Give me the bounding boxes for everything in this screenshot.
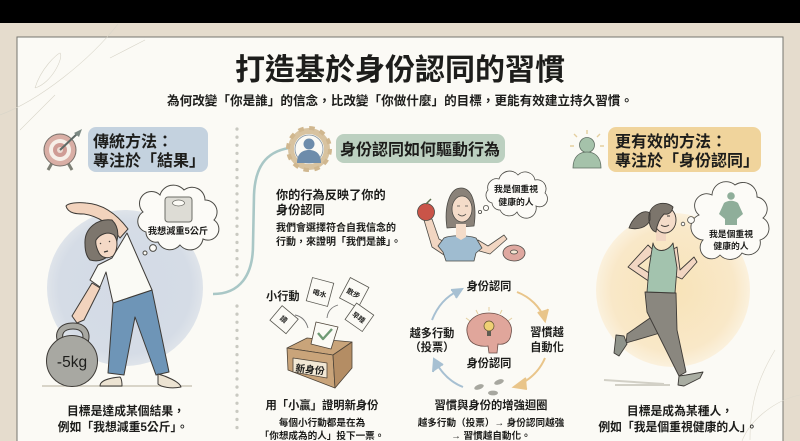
eyes and smile (661, 216, 670, 226)
jeans (108, 290, 169, 375)
text block: small wins (260, 398, 384, 441)
arms (628, 245, 655, 282)
text block: behaviour reflects identity: 行動，來證明「我們是誰」。 (276, 235, 401, 248)
thought bubble: lose 5kg: 我想減重5公斤 (148, 225, 208, 236)
text block: small wins: 每個小行動都是在為 (279, 417, 366, 429)
dotted dividers (235, 129, 239, 431)
icon: ballot box (287, 322, 352, 388)
neck (656, 230, 666, 241)
illustration: woman running (604, 203, 703, 386)
text block: behaviour reflects identity: 身份認同 (276, 202, 325, 217)
text block: loop explanation: 習慣與身份的增強迴圈 (435, 398, 547, 412)
panel: traditional method (42, 127, 219, 434)
illustration: person stretching with kettlebell (42, 203, 192, 388)
left arm (424, 219, 450, 255)
caption: traditional goal: 目標是達成某個結果， (67, 404, 185, 418)
caption: identity goal (598, 404, 758, 434)
ground shadow (604, 380, 670, 385)
heading: more effective method (608, 127, 761, 172)
icon: kettlebell -5kg (46, 326, 98, 386)
icon: glowing person (570, 130, 604, 168)
donut (503, 245, 525, 261)
chart: habit identity reinforcing loop (410, 279, 565, 441)
face (654, 207, 676, 233)
caption: traditional goal: 例如「我想減重5公斤」。 (58, 420, 188, 434)
arrow: identity to habit (517, 292, 548, 321)
note: read: 讀 (278, 314, 289, 325)
right arm (476, 235, 507, 254)
thought bubble: healthy person: 我是個重視 (709, 228, 753, 239)
ballot with check (311, 322, 338, 349)
heading: traditional method: 專注於「結果」 (93, 151, 205, 170)
icon: ballot box: 新身份 (295, 362, 326, 378)
cycle node: more actions (410, 326, 454, 354)
text block: loop explanation (418, 398, 565, 441)
thought bubble: healthy person: 我是個重視 (494, 183, 538, 194)
caption: identity goal: 例如「我是個重視健康的人」。 (598, 420, 758, 434)
illustration: blue circle backdrop (47, 210, 203, 366)
icon: target (44, 129, 82, 170)
icon: bathroom scale (165, 197, 192, 222)
subtitle: 為何改變「你是誰」的信念，比改變「你做什麼」的目標，更能有效建立持久習慣。 (167, 93, 633, 108)
heading: identity (336, 134, 505, 163)
tank top (647, 243, 677, 293)
icon: brain with light bulb (466, 307, 512, 353)
arrow: actions to identity (432, 289, 462, 320)
icon: person silhouette (719, 192, 743, 225)
heading: identity: 身份認同如何驅動行為 (340, 140, 500, 159)
hair (85, 220, 118, 261)
icon: gear with person (288, 128, 330, 170)
icon: action notes (270, 278, 374, 334)
front leg (645, 292, 686, 376)
hair and ponytail (629, 203, 673, 232)
cycle node: more actions: 越多行動 (410, 326, 454, 340)
title: 打造基於身份認同的習慣 (235, 54, 565, 87)
eyes and smile (457, 206, 468, 216)
cycle node: habit automation: 習慣越 (530, 325, 564, 339)
eyes and mouth (100, 241, 110, 252)
panel: how identity drives behaviour (260, 128, 565, 441)
thought bubble: lose 5kg (138, 185, 219, 255)
thought bubble: healthy person (478, 171, 547, 218)
text block: small wins: 用「小贏」證明新身份 (266, 398, 379, 412)
cycle node: identity: 身份認同 (467, 279, 511, 293)
t-shirt (90, 233, 152, 303)
arrow: footprints to actions (433, 359, 463, 387)
heading: more effective method: 更有效的方法： (615, 132, 727, 151)
illustration: warm circle backdrop (596, 213, 750, 367)
box top (287, 338, 352, 355)
thought bubble: healthy person: 健康的人 (713, 240, 749, 251)
label: small actions: 小行動 (266, 289, 300, 303)
raised arm (66, 203, 128, 238)
arrows: actions into the box (295, 305, 338, 328)
illustration: woman choosing apple over donut (418, 188, 525, 261)
text block: behaviour reflects identity (276, 187, 401, 248)
caption: traditional goal (58, 404, 188, 434)
cycle node: more actions: （投票） (410, 340, 454, 354)
hair (446, 188, 475, 228)
caption: identity goal: 目標是成為某種人， (627, 404, 733, 418)
box side (333, 342, 352, 388)
note: drink water: 喝水 (312, 287, 328, 300)
cycle node: centre identity: 身份認同 (467, 356, 511, 370)
tee (438, 236, 482, 261)
box front (287, 348, 335, 388)
cycle node: habit automation: 自動化 (530, 340, 564, 354)
connector arrow: from left panel to centre heading (213, 148, 289, 294)
arrow: habit to footprints (514, 358, 545, 389)
icon: footprints (473, 378, 505, 395)
back leg (626, 318, 660, 343)
back shoe (614, 335, 627, 356)
text block: behaviour reflects identity: 我們會選擇符合自我信念的 (276, 221, 396, 234)
heading: traditional method: 傳統方法： (93, 132, 173, 151)
apple (418, 204, 434, 220)
front shoe (678, 372, 703, 386)
panel: more effective method (570, 127, 769, 434)
heading: traditional method (88, 127, 208, 172)
thought bubble: healthy person: 健康的人 (498, 196, 534, 207)
ground shadow (42, 385, 192, 387)
lower arm (72, 283, 100, 323)
face (452, 196, 472, 222)
text block: behaviour reflects identity: 你的行為反映了你的 (276, 187, 386, 202)
shoes (100, 377, 122, 386)
note: walk: 散步 (345, 286, 362, 301)
note: early sleep: 早睡 (350, 310, 367, 325)
cycle node: habit automation (530, 325, 564, 354)
box label (293, 358, 327, 378)
icon: kettlebell -5kg: -5kg (57, 354, 87, 371)
neck (456, 224, 466, 240)
text block: loop explanation: 越多行動（投票）→ 身份認同越強 (418, 417, 565, 429)
face (96, 233, 117, 258)
thought bubble: healthy person (681, 182, 769, 259)
heading: more effective method: 專注於「身份認同」 (615, 151, 759, 170)
